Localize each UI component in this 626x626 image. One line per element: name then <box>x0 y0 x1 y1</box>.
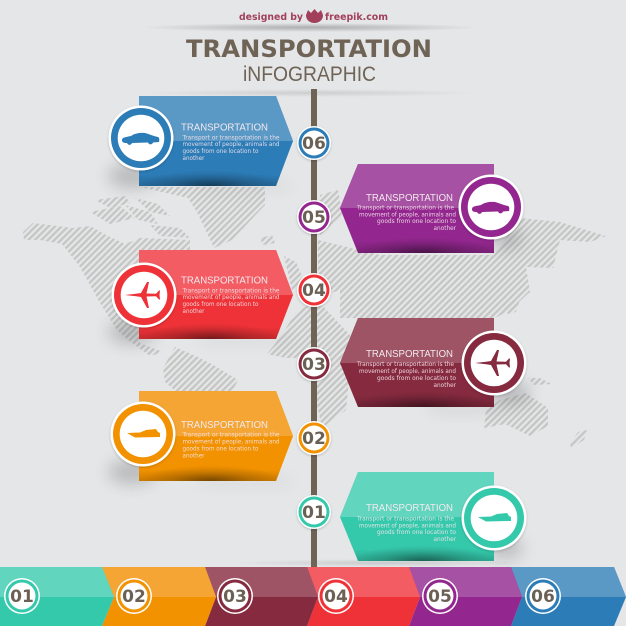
ribbon top shadow <box>230 559 530 567</box>
body text <box>182 288 280 315</box>
heading: TRANSPORTATION <box>181 122 268 134</box>
ribbon badge 05: 05 <box>428 587 452 607</box>
panel 05: purple car <box>340 164 524 253</box>
maroon segment 03 <box>205 567 318 626</box>
marker 06 <box>297 126 331 160</box>
credit line: freepik.com <box>325 12 388 23</box>
icon: boat badge <box>110 402 176 466</box>
marker 05 <box>297 200 331 234</box>
marker 02 <box>297 421 331 455</box>
heading: TRANSPORTATION <box>181 274 268 286</box>
ribbon badge 06: 06 <box>531 587 555 607</box>
body text: goods from one location to <box>377 529 456 536</box>
marker 01: 01 <box>302 503 326 523</box>
icon: car badge <box>458 174 524 240</box>
credit line <box>239 9 388 23</box>
ribbon badge 04 <box>318 578 354 614</box>
marker 01 <box>297 495 331 529</box>
heading: TRANSPORTATION <box>181 419 268 431</box>
panel 01: teal boat <box>340 472 526 561</box>
title banner <box>140 23 480 97</box>
marker 02: 02 <box>302 429 326 449</box>
marker 06: 06 <box>302 134 326 154</box>
marker 03: 03 <box>302 355 326 375</box>
body text: Transport or transportation is the <box>182 288 280 294</box>
body text: another <box>182 155 205 162</box>
body text <box>356 204 456 232</box>
body text: goods from one location to <box>182 148 259 155</box>
blue segment 06 <box>511 567 626 626</box>
body text: another <box>182 308 205 315</box>
panel 04: red plane <box>112 250 293 339</box>
body text <box>356 516 456 543</box>
body text <box>182 134 280 162</box>
ribbon badge 01 <box>4 578 40 614</box>
ribbon badge 03 <box>217 578 253 614</box>
ribbon badge 03: 03 <box>223 587 247 607</box>
credit line: designed by <box>239 12 303 23</box>
panel 02: orange boat <box>110 391 293 481</box>
body text: Transport or transportation is the <box>356 516 454 522</box>
body text: goods from one location to <box>377 218 456 225</box>
orange segment 02 <box>102 567 216 626</box>
icon: plane badge <box>462 330 526 396</box>
purple segment 05 <box>409 567 522 626</box>
marker 04 <box>297 273 331 307</box>
heading: TRANSPORTATION <box>366 348 453 360</box>
teal segment 01 <box>0 567 114 626</box>
body text: goods from one location to <box>182 446 259 452</box>
panel 03: maroon plane <box>340 318 526 407</box>
ribbon badge 02: 02 <box>122 587 146 607</box>
body text: movement of people, animals and <box>182 294 280 301</box>
body text: Transport or transportation is the <box>182 134 280 142</box>
body text: goods from one location to <box>377 375 456 382</box>
body text: Transport or transportation is the <box>182 432 280 438</box>
body text: another <box>182 452 205 460</box>
ribbon badge 02 <box>116 578 152 614</box>
body text: movement of people, animals and <box>182 438 280 446</box>
icon: car badge <box>108 106 174 170</box>
heading: TRANSPORTATION <box>366 502 453 514</box>
body text: movement of people, animals and <box>359 522 456 530</box>
body text: Transport or transportation is the <box>356 361 454 368</box>
body text: goods from one location to <box>182 301 259 308</box>
title: TRANSPORTATION <box>186 35 432 63</box>
body text: Transport or transportation is the <box>356 204 454 212</box>
body text: movement of people, animals and <box>182 141 280 148</box>
marker 04: 04 <box>302 281 326 301</box>
body text <box>356 361 456 389</box>
ribbon badge 04: 04 <box>324 587 348 607</box>
world map <box>23 187 606 448</box>
body text: movement of people, animals and <box>359 368 456 375</box>
marker 03 <box>297 347 331 381</box>
ribbon badge 01: 01 <box>10 587 34 607</box>
marker 05: 05 <box>302 208 326 228</box>
panel 06: blue car <box>108 96 293 186</box>
icon: boat badge <box>462 486 526 550</box>
body text: movement of people, animals and <box>359 212 456 218</box>
timeline pole <box>311 89 317 567</box>
panel shadows <box>108 164 530 558</box>
body text: another <box>434 536 456 543</box>
ribbon badge 05 <box>422 578 458 614</box>
bottom ribbon <box>0 567 626 626</box>
body text: another <box>434 225 456 232</box>
ribbon badge 06 <box>525 578 561 614</box>
subtitle: iNFOGRAPHIC <box>243 62 376 86</box>
heading: TRANSPORTATION <box>366 192 453 204</box>
icon: plane badge <box>112 262 176 328</box>
body text <box>182 432 280 460</box>
icon: crown <box>306 9 323 23</box>
body text: another <box>434 382 456 389</box>
red segment 04 <box>307 567 420 626</box>
